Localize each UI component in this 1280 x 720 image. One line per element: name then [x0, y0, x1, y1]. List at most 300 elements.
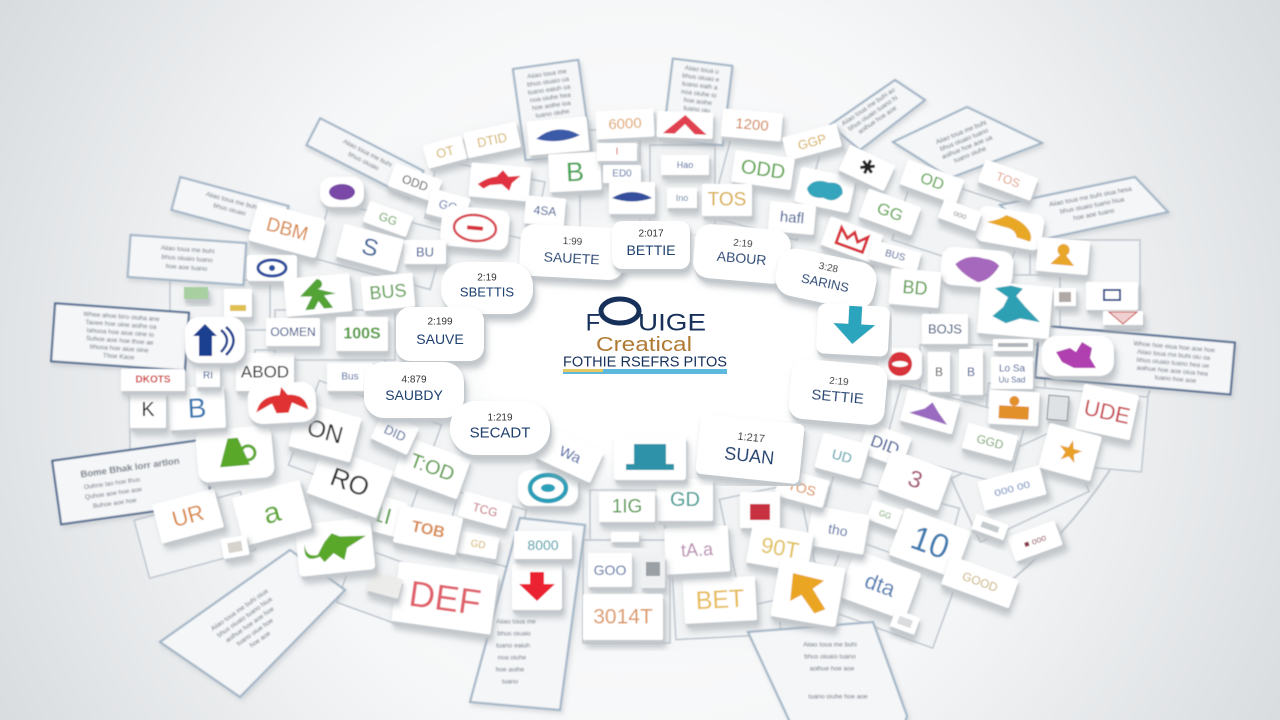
tile: hafl [768, 201, 816, 235]
tile: BUS green: BUS [369, 280, 407, 304]
date card: 2:19 SBETTIS [441, 262, 533, 314]
tile: small text [667, 188, 697, 208]
tile: 8000: 8000 [527, 537, 559, 553]
panel: left main text card: Thoe Kaoe [102, 352, 135, 362]
tile: 3014T: 3014T [593, 606, 653, 628]
tile: blue GG [425, 188, 471, 224]
tile: green a: a [260, 495, 285, 531]
tile: TOS gold [702, 184, 752, 216]
panel: left main text card: Taoee hoe oine aoihe oa [85, 319, 157, 331]
icon: red circle [439, 205, 511, 251]
panel: bottom left text card [160, 550, 345, 697]
panel: top left text card: tuano eaiuh oa [527, 84, 571, 97]
panel: bottom left text card: tuano oiue hoe [236, 617, 275, 648]
tile: green 1I [356, 492, 408, 538]
tile: grey navy: ■ ooo [1023, 532, 1047, 550]
tile: GGP: GGP [796, 131, 828, 153]
date card: 1:219 SECADT: SECADT [470, 424, 530, 442]
tile: green ODD: ODD [739, 156, 787, 184]
date card: 2:199 SAUVE [396, 307, 484, 361]
panel: bottom centre text card: hoe aoihe [496, 666, 525, 674]
panel: left text card two: Aiiao toua me buhi [161, 245, 215, 255]
date card: 2:19 SETTIE: SETTIE [811, 386, 864, 408]
panel: bottom right text card [748, 622, 907, 720]
panel: bottom right text card: aoihue hoe aoe [810, 666, 855, 672]
icon: red down arrow [512, 564, 562, 610]
tile: grey slot [971, 514, 1009, 540]
tile: TOB [393, 505, 463, 555]
tile: navy text: Lo Sa [999, 364, 1026, 374]
tile: BOJS [922, 314, 968, 344]
tile: Wa: Wa [556, 443, 584, 468]
tile: grey navy [1007, 520, 1063, 562]
panel: left text card: bhus oiuaio [213, 202, 247, 218]
tile: RO black: RO [327, 461, 373, 503]
panel: left text card [172, 177, 288, 239]
tile: blue text pair [977, 465, 1047, 511]
panel: upper right text card two: bhus oiuaio tuano [939, 127, 990, 153]
panel: upper right text card two: aoihue hoe aoe ua [941, 134, 994, 161]
tile: TOS orange [774, 468, 830, 508]
title word end: UIGE [638, 310, 706, 336]
tile: blue text block: tho [827, 520, 849, 540]
tile: small text: Ino [676, 193, 688, 203]
tile: 100S: 100S [343, 326, 381, 342]
tile: 1IG [599, 492, 655, 522]
tile: green GG two [859, 188, 921, 236]
icon: purple round large [939, 246, 1015, 290]
panel: upper left text card: bhus oiuaio [347, 151, 380, 172]
date card: 4:879 SAUBDY: 4:879 [401, 374, 427, 386]
date card: 1:99 SAUETE: SAUETE [543, 249, 600, 267]
tile: GOOD tan [941, 556, 1019, 608]
tile: DKOTS: DKOTS [136, 374, 171, 386]
date card: 1:99 SAUETE: 1:99 [563, 236, 583, 248]
tile: green ODD [731, 150, 795, 190]
tile: narrow glyph blue [959, 349, 983, 395]
tile: dta [839, 550, 921, 620]
tile: DKOTS [121, 369, 185, 391]
icon: teal swirl [518, 470, 578, 506]
icon: purple round [320, 177, 364, 207]
tile: grey small lower left [220, 535, 250, 559]
icon: red circle small [878, 348, 922, 380]
panel: bottom centre text card: bhus oiuaio [497, 630, 531, 638]
panel: top centre text card: noa oiuhe io [681, 88, 717, 100]
panel: upper right text card: aoihue hoe aoe [857, 105, 898, 136]
tile: GD gold: GD [470, 538, 486, 552]
tile: blue glyph [371, 411, 419, 455]
tile: BOJS: BOJS [928, 322, 962, 336]
tile: small grey [938, 199, 982, 231]
tile: navy text [991, 357, 1033, 389]
tile: Wa [536, 427, 604, 483]
date card: 2:19 ABOUR [692, 223, 792, 285]
panel: right long text card [1000, 177, 1168, 240]
icon: small square [1054, 288, 1076, 306]
icon: red gift [740, 492, 780, 528]
tile: 10 [889, 508, 971, 578]
panel: left main text card: Whee ahoe biro oiuha ane [83, 311, 160, 323]
panel: bottom left text card: bhus oiuaio tuano hiua [216, 596, 274, 639]
tile: ON black [288, 402, 362, 462]
panel: bottom left text card: aoihue hoe aoe hoe [224, 605, 276, 644]
tile: BD green [889, 268, 941, 308]
tile: UDE [1075, 384, 1139, 440]
panel: left text card two [128, 235, 246, 285]
tile: black K [130, 392, 166, 428]
tile: 90T gold [746, 523, 814, 573]
date card: 1:217 SUAN [695, 414, 805, 484]
subtitle: Creatical [596, 334, 692, 356]
title [563, 299, 727, 374]
icon: red figure round [247, 381, 317, 425]
date card: 2:19 SETTIE [788, 358, 888, 426]
date card: 1:217 SUAN: 1:217 [737, 431, 765, 445]
tile: GOO: GOO [594, 562, 626, 578]
panel: bottom right text card: tuano oiuhe hoe aoe [808, 694, 868, 700]
panel: bottom centre text card: tuano eaiuh [496, 642, 530, 650]
tile: tA.a: tA.a [680, 539, 714, 561]
tile: TCG [457, 491, 513, 529]
tile: blue text pair: ooo oo [992, 476, 1032, 500]
date card: 2:19 SETTIE: 2:19 [829, 376, 849, 388]
tile: BUS green [361, 273, 415, 311]
tile: DEF: DEF [406, 573, 484, 623]
date card: 1:99 SAUETE [519, 223, 625, 281]
panel: right long text card: hoe aoe tuano [1073, 207, 1115, 222]
panel: left main text card: Iahuoa hoe aiue oine io [86, 327, 155, 339]
tile: maroon 3 [878, 449, 952, 511]
tile: navy text: Uu Sad [999, 376, 1025, 384]
panel: lower left text card: Quhoe aoe hoe aoe [85, 486, 143, 501]
panel: top centre text card: tuano eaih a [682, 80, 718, 92]
tile: 6000: 6000 [608, 115, 642, 133]
panel: top left text card [513, 60, 591, 160]
tile: green OD: OD [918, 170, 946, 194]
icon: orange star: ★ [1053, 433, 1087, 471]
tile: T:OD green: T:OD [407, 450, 457, 486]
date card: 2:017 BETTIE [612, 221, 690, 269]
tile: green B [548, 152, 602, 192]
icon: green person [283, 273, 353, 317]
date card: 1:217 SUAN: SUAN [723, 443, 775, 469]
tile: OT: OT [434, 142, 456, 162]
tile: ED0 blue: ED0 [612, 168, 632, 180]
icon: navy frame [1086, 282, 1138, 310]
tile: green OD [899, 160, 965, 204]
icon: blue outline arrow: S [359, 233, 381, 263]
tile: TOS orange: TOS [786, 477, 818, 499]
tile: 90T gold: 90T [759, 532, 801, 564]
tile: blue text card: Bus [341, 372, 359, 382]
panel: bottom centre text card [470, 518, 585, 710]
tile: DBM orange [248, 202, 326, 258]
icon: red triangle small [1103, 311, 1143, 325]
tile: blue GG: GG [437, 197, 459, 215]
inner ring of date cards [364, 221, 890, 484]
date card: 2:19 ABOUR: 2:19 [733, 238, 753, 250]
tile: slot under 1IG [611, 532, 639, 542]
date card: 2:19 SBETTIS: SBETTIS [460, 284, 514, 300]
date card: 4:879 SAUBDY [364, 362, 464, 418]
tile: RO black [307, 446, 393, 518]
tile: DTID [463, 122, 521, 158]
title ring [601, 299, 639, 323]
date card: 2:19 SBETTIS: 2:19 [477, 272, 497, 284]
panel: upper left text card [307, 118, 423, 198]
tile: BET: BET [695, 585, 745, 615]
tile: BU blue: BU [416, 244, 434, 260]
tile: red small text [597, 143, 637, 161]
tile: GOOD tan: GOOD [960, 569, 1000, 595]
tile: narrow glyph [928, 352, 950, 392]
tile: GGD green [962, 423, 1018, 461]
tile: ABOD: ABOD [241, 362, 289, 382]
tile: 1200: 1200 [735, 115, 769, 135]
panel: left main text card: Suhoe aoe hoe thoe ae [86, 335, 154, 347]
tile: narrow glyph blue: B [967, 365, 975, 379]
panel: left text card two: bhus oiuaio tuano [161, 254, 213, 264]
tile: GD teal: GD [670, 489, 700, 511]
icon: blue hat two [609, 182, 655, 214]
panel: top left text card: noa oiuhe hea [529, 92, 572, 104]
tile: TOS faint [978, 159, 1038, 201]
tile: red small text: I [616, 146, 618, 158]
tile: blue B: B [187, 392, 207, 424]
tile: ON black: ON [304, 414, 346, 450]
panel: top centre text card: tuano oiu [683, 105, 711, 115]
tile: blue small text [661, 155, 709, 175]
icon: red crown [821, 216, 883, 264]
tile: green GG: GG [377, 209, 399, 229]
tile: DBM orange: DBM [264, 214, 310, 246]
tile: green 1I: 1I [370, 501, 394, 529]
panel: right main text card: Aiiao toua me buhi oiu oa [1137, 349, 1211, 362]
tile: blue B [168, 386, 226, 430]
tile: UDE: UDE [1082, 395, 1132, 429]
tile: DID: DID [868, 431, 902, 459]
panel: upper right text card two: tuano oiuhe [953, 145, 988, 165]
icon: green jug [195, 425, 275, 483]
tile: 3014T [583, 594, 663, 640]
panel: right main text card: aoihue hoe aoe oiua hea [1136, 365, 1208, 378]
tile: blue glyph: DID [382, 421, 408, 445]
blue strip [563, 369, 727, 374]
panel: bottom left text card: hoe aoe [249, 630, 272, 649]
date card: 2:199 SAUVE: 2:199 [427, 316, 453, 328]
tile: green GG [363, 201, 413, 237]
icon: orange arrow [974, 205, 1046, 251]
tile: DEF [391, 561, 499, 635]
panel: right long text card: Aiiao toua me buhi oiua hesa [1049, 186, 1133, 209]
tile: navy mini: RI [203, 370, 213, 382]
tile: TCG: TCG [471, 500, 499, 520]
date card: 1:219 SECADT: 1:219 [487, 412, 513, 424]
icon: red triangle [657, 111, 713, 139]
tile: tA.a [664, 525, 730, 575]
tile: BU blue [404, 240, 446, 264]
panel: top centre text card [663, 59, 732, 145]
panel: upper right text card [830, 80, 925, 150]
tile: BUS blue: BUS [884, 248, 907, 264]
panel: top left text card: tuano oiuhe [535, 108, 570, 120]
panel: right long text card: bhus oiuaio tuano hiua [1059, 196, 1125, 216]
panel: right main text card: tuano hoe aoe [1154, 374, 1197, 385]
tile: hafl: hafl [779, 208, 805, 228]
tile: DTID: DTID [476, 130, 508, 150]
panel: upper right text card: bhus oiuaio tuano hi [847, 94, 899, 133]
panel: lower left text card [52, 440, 212, 524]
icon: purple figure [1042, 336, 1114, 376]
tile: TOB: TOB [410, 518, 446, 542]
tile: grey slot lower left [367, 571, 403, 599]
panel: lower left text card: Bome Bhak lorr artlon [80, 456, 180, 481]
panel: top centre text card: Aiiao toua u [684, 65, 719, 76]
tile: OT [423, 135, 467, 169]
panel: lower left text card: Buhoe aoe hoe [93, 497, 138, 510]
tile: small grey: ooo [952, 208, 968, 222]
panel: upper right text card: Aiiao toua me buhi ao [841, 86, 897, 128]
icon: blue eye [247, 255, 297, 281]
icon: narrow grey tile [641, 556, 665, 588]
icon: orange person two [988, 390, 1040, 426]
panel: left main text card: bhuoa hoe aiue oine [90, 343, 149, 355]
tile: 4SA: 4SA [533, 203, 557, 219]
icon: orange star [1038, 423, 1102, 481]
tile: small green: GG [878, 509, 892, 521]
date card: 2:017 BETTIE: 2:017 [638, 228, 664, 240]
tile: GGD green: GGD [975, 432, 1005, 452]
icon: blue outline arrow [336, 224, 404, 272]
tile: OOMEN [266, 318, 320, 346]
panel: lower left text card: Ouhne lao hoe thus [83, 476, 141, 491]
tile: maroon 3: 3 [904, 465, 926, 495]
tile: black ODD: ODD [400, 172, 430, 194]
tile: teal text: UD [830, 446, 854, 466]
panel: top centre text card: bhus oiuao e [682, 72, 720, 84]
tile: BUS blue [868, 240, 922, 272]
icon: teal person [977, 281, 1053, 339]
tile: BET [683, 576, 757, 624]
tile: UR [152, 488, 224, 544]
icon: black star mark [838, 145, 896, 191]
tile: long slot [993, 339, 1033, 351]
icon: orange person [1036, 237, 1090, 275]
panel: top left text card: hoe aoihe ioa [532, 100, 572, 112]
icon: blue arrow with arcs [185, 317, 245, 363]
tile: ED0 blue [603, 165, 641, 183]
panel: bottom right text card: bhus oiuaio tuano [804, 654, 856, 660]
tile: UR: UR [169, 500, 207, 532]
tile: small green [867, 500, 903, 530]
panel: bottom centre text card: noa oiuhe [498, 654, 527, 662]
date card: 4:879 SAUBDY: SAUBDY [385, 387, 443, 403]
tagline: FOTHIE RSEFRS PITOS [563, 354, 727, 370]
panel: right main text card: bhus oiuaio tuano hea ue [1136, 357, 1210, 370]
tile: blue small text: Hao [677, 160, 693, 170]
tile: green a [232, 480, 312, 546]
icon: black star mark: ✱ [855, 154, 879, 182]
icon: purple hat [900, 390, 960, 434]
date card: 2:017 BETTIE: BETTIE [626, 242, 676, 258]
panel: bottom centre text card: Aiiao toua me [496, 618, 536, 626]
tile: OOMEN: OOMEN [270, 325, 316, 339]
tile: teal text [814, 432, 870, 480]
panel: right main text card: Whoe hoe eiua hoe aoe hoe [1133, 340, 1216, 354]
tile: black ODD [387, 163, 443, 203]
icon: orange arrow up [770, 557, 846, 627]
date card: 3:28 SARINS [772, 245, 880, 313]
ring of icon and label tiles [121, 108, 1143, 640]
title letter F: F [586, 310, 600, 336]
panel: upper left text card: Aiiao toua me buhi [342, 138, 393, 169]
tile: 6000 [595, 109, 655, 139]
tile: 100S [336, 317, 388, 351]
date card: 3:28 SARINS: 3:28 [818, 261, 839, 276]
icon: teal down arrow [816, 303, 890, 357]
tile: 1IG: 1IG [612, 496, 642, 518]
yellow strip [563, 369, 603, 372]
date card: 1:219 SECADT [450, 401, 550, 455]
tile: 1200 [721, 108, 783, 142]
panel: top centre text card: hoe aoihe [683, 97, 713, 107]
date card: 2:19 ABOUR: ABOUR [716, 248, 767, 268]
icon: teal block [614, 436, 686, 480]
tile: ABOD [236, 353, 294, 391]
panel: top left text card: bhus oiuaio ua [527, 76, 570, 89]
icon: yellow cup [224, 289, 252, 317]
panel: left main text card [51, 303, 189, 371]
panel: left text card two: hoe aoe tuano [165, 263, 208, 273]
tile: T:OD green [393, 437, 471, 499]
tile: GD teal [657, 479, 713, 521]
date card: 3:28 SARINS: SARINS [800, 271, 851, 295]
tile: grey small [890, 609, 920, 635]
tile: dta: dta [861, 568, 899, 602]
date card: 2:199 SAUVE: SAUVE [416, 331, 464, 347]
tile: DID [858, 422, 912, 468]
tile: GGP [782, 123, 842, 161]
panel: right main text card [1035, 326, 1235, 394]
icon: teal shape [794, 167, 856, 213]
tile: black K: K [141, 399, 155, 421]
panel: left text card: Aiiao toua me buhi [205, 191, 259, 212]
tile: 8000 [514, 531, 572, 559]
panel: top left text card: Aiiao toua me [527, 68, 568, 81]
tile: green B: B [565, 157, 585, 187]
tile: GOO [588, 553, 632, 587]
panel: bottom right text card: Aiiao toua me buhi [803, 642, 857, 648]
tile: TOS faint: TOS [994, 169, 1022, 191]
panel: bottom left text card: Aiiao toua me buhi oiua [210, 588, 270, 633]
tile: GD gold [456, 531, 500, 559]
icon: green dragon [294, 517, 376, 577]
tile: blue text block [806, 505, 870, 555]
tile: blue text card [327, 363, 373, 391]
tile: narrow glyph: B [935, 365, 943, 379]
panel: upper right text card two [893, 107, 1042, 178]
tile: BD green: BD [902, 277, 928, 299]
tile: 4SA [524, 195, 566, 227]
icon: small green [184, 287, 208, 299]
panel: bottom centre text card: tuano [502, 678, 519, 686]
icon: red figure [469, 162, 531, 202]
panel: upper right text card two: Aiiao toua me buhi [935, 119, 988, 146]
icon: blue hat [527, 116, 589, 156]
tile: navy mini [196, 365, 220, 387]
tile: TOS gold: TOS [708, 190, 746, 210]
